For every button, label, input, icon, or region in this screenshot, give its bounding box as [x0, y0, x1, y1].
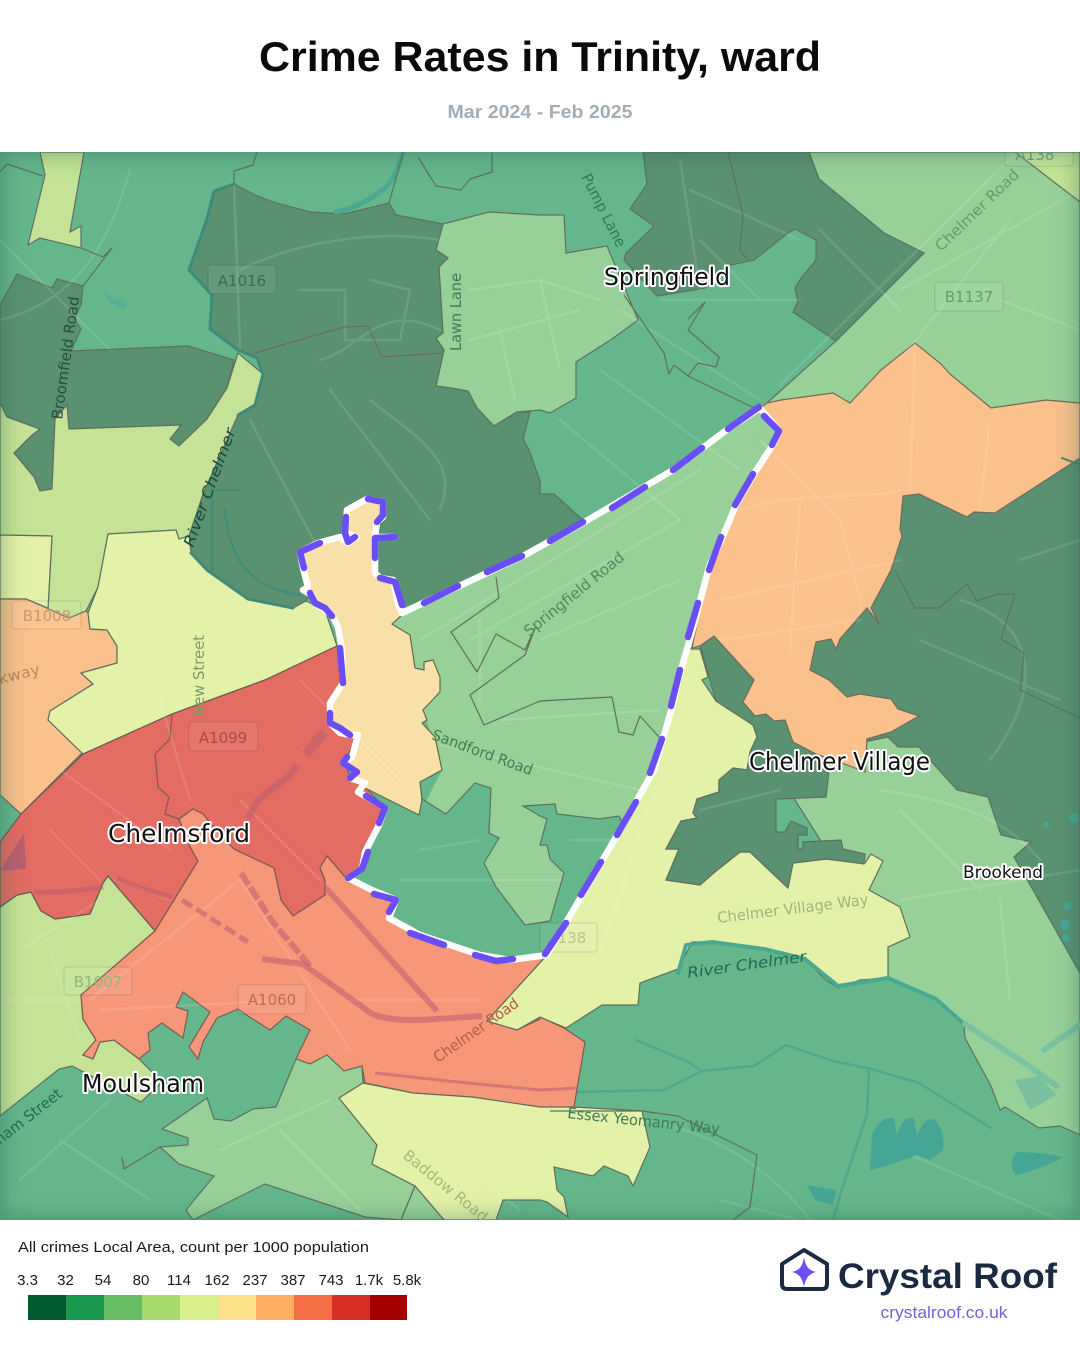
road shield: A138 — [1004, 152, 1074, 166]
road shield: B1138: 138 — [558, 929, 586, 947]
legend scale labels: 162 — [204, 1272, 230, 1289]
legend scale labels — [17, 1272, 422, 1289]
boundary purple dashes — [300, 407, 779, 961]
road shield: A1099: A1099 — [199, 729, 247, 747]
logo: house icon — [782, 1250, 827, 1289]
road shield: A1016 — [208, 265, 276, 294]
road shield: A1060: A1060 — [248, 991, 296, 1009]
road shield: B1138 — [540, 923, 597, 952]
road shield: B1137: B1137 — [945, 288, 993, 306]
region: west yellow-green — [0, 353, 263, 618]
road label: Sandford Road: Sandford Road — [430, 726, 535, 779]
place label: Chelmer Village: Chelmer Village — [749, 747, 930, 776]
region: Trinity ward south mid green — [348, 783, 623, 960]
legend scale labels: 54 — [95, 1272, 111, 1289]
region: north-east light green — [700, 152, 1080, 1135]
map base: mid green areas — [0, 152, 1080, 1220]
road label: Baddow Road: Baddow Road — [399, 1146, 492, 1226]
region: south light green — [160, 1055, 415, 1220]
region: Trinity ward cream — [300, 499, 442, 815]
legend scale labels: 743 — [318, 1272, 344, 1289]
region: Springfield light green — [436, 212, 638, 426]
region: south light green triangle — [401, 1186, 444, 1220]
legend scale labels: 32 — [57, 1272, 74, 1289]
region: central dark green near Chelmer Village — [666, 636, 865, 888]
region: south salmon — [81, 809, 585, 1107]
road label: Chelmer Village Way: Chelmer Village Way — [716, 891, 869, 927]
road label: New Street: New Street — [190, 635, 208, 717]
region: east pale yellow wedge — [487, 649, 910, 1030]
road shield: B1137 — [935, 282, 1003, 311]
road shield: B1008: B1008 — [23, 607, 71, 625]
road shield: B1007: B1007 — [74, 973, 122, 991]
red sub-area outline — [155, 714, 179, 819]
region: Chelmsford red — [0, 646, 384, 931]
legend colour bar — [28, 1295, 407, 1320]
river and streams — [189, 153, 1080, 1220]
place label: Chelmsford: Chelmsford — [108, 819, 250, 848]
road label: Lawn Lane: Lawn Lane — [447, 273, 465, 351]
legend scale labels: 80 — [133, 1272, 149, 1289]
Trinity ward boundary — [300, 407, 779, 961]
place label: Moulsham: Moulsham — [82, 1069, 204, 1098]
logo: website: crystalroof.co.uk — [880, 1303, 1008, 1322]
road shield: B1007 — [64, 967, 132, 995]
logo: wordmark: Crystal Roof — [838, 1257, 1057, 1296]
road shield: A1060 — [238, 985, 306, 1014]
region: east dark green — [805, 458, 1080, 973]
road label: Chelmer Road salmon: Chelmer Road — [430, 994, 522, 1066]
legend scale labels: 3.3 — [17, 1272, 38, 1289]
boundary white casing — [300, 408, 779, 960]
region: north dark green — [624, 152, 924, 341]
road label: Essex Yeomanry Way: Essex Yeomanry Way — [567, 1104, 721, 1138]
region: north-west yellow-green strip — [28, 152, 84, 248]
region: west dark green — [0, 274, 234, 491]
region: east orange — [692, 343, 1080, 772]
road label: Chelmer Road north-east: Chelmer Road — [931, 166, 1023, 255]
legend scale labels: 5.8k — [393, 1272, 422, 1289]
region: west pale box — [0, 535, 52, 608]
road label: Pump Lane: Pump Lane — [577, 171, 630, 250]
legend scale labels: 1.7k — [355, 1272, 384, 1289]
road shield: A1099 — [189, 722, 258, 751]
ward and area inner boundaries — [0, 152, 1080, 1220]
map dark road and rail lines — [0, 732, 578, 1090]
road shield: A1016: A1016 — [218, 272, 266, 290]
legend scale labels: 387 — [280, 1272, 306, 1289]
road shield: A138: A138 — [1016, 146, 1054, 164]
lakes and ponds — [103, 293, 1079, 1205]
road label: River Chelmer north: River Chelmer — [180, 425, 240, 549]
region: centre-left pale yellow — [48, 530, 337, 754]
region: west orange — [0, 599, 117, 814]
legend scale labels: 114 — [167, 1272, 191, 1289]
place label: Brookend: Brookend — [963, 863, 1043, 883]
legend scale labels: 237 — [242, 1272, 268, 1289]
road label: Broomfield Road: Broomfield Road — [48, 295, 83, 421]
river label: River Chelmer south: River Chelmer — [686, 947, 808, 982]
legend title: All crimes Local Area, count per 1000 population — [18, 1239, 369, 1256]
place label: Springfield: Springfield — [604, 263, 730, 291]
map edge vignette — [0, 152, 1080, 1220]
road label: Springfield Road: Springfield Road — [520, 548, 628, 640]
road shield: B1008 — [12, 601, 81, 629]
title: Crime Rates in Trinity, ward — [259, 33, 821, 80]
region: Trinity ward light green — [393, 412, 763, 924]
region: central north-west dark green — [189, 184, 585, 613]
region: south-west yellow-green — [0, 876, 162, 1116]
region: top-right yellow-green corner — [1015, 152, 1080, 202]
subtitle: date range: Mar 2024 - Feb 2025 — [448, 102, 632, 122]
region: Baddow pale yellow — [339, 1083, 650, 1220]
